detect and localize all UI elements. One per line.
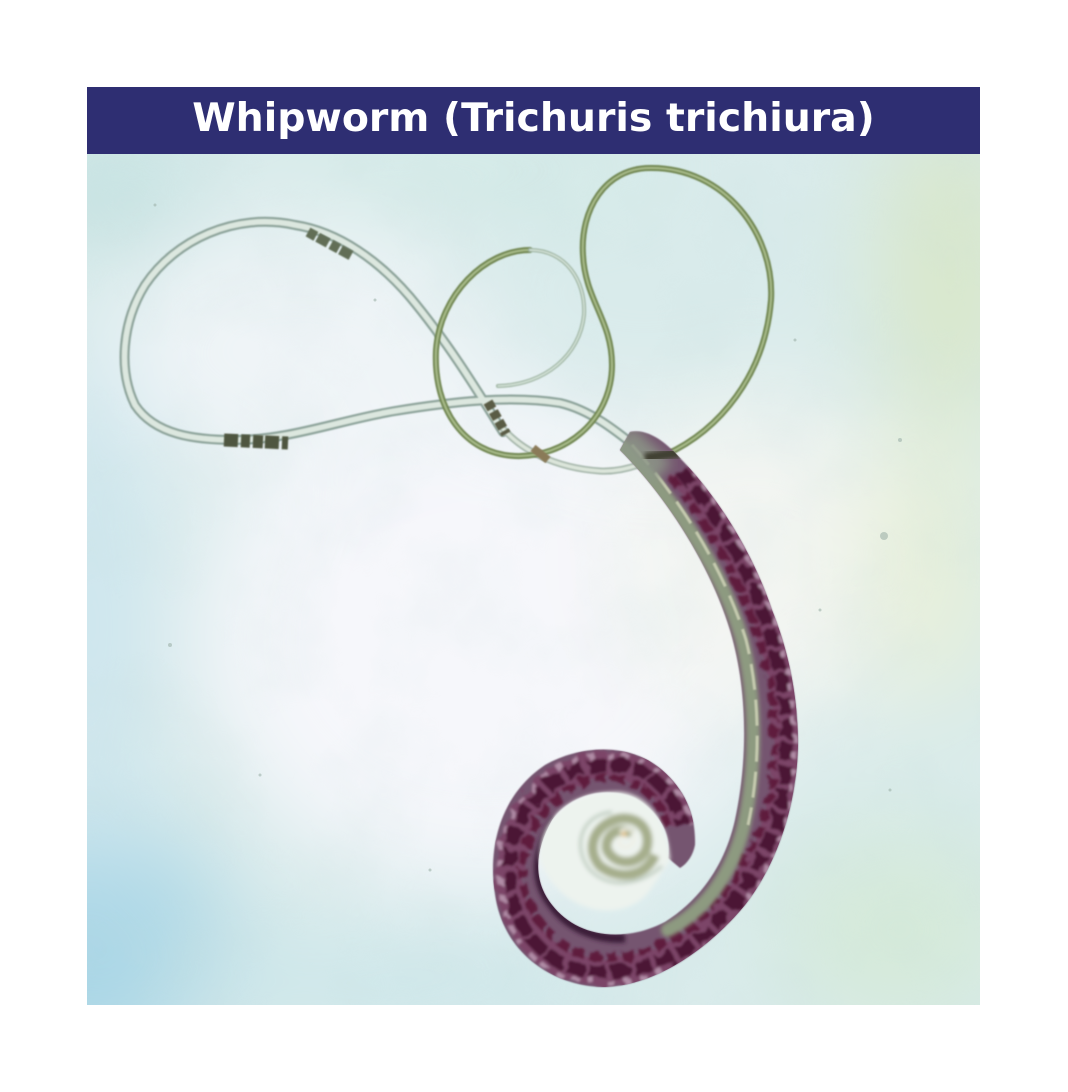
title text: Whipworm (Trichuris trichiura) bbox=[192, 95, 875, 141]
outer purple band and eggs bbox=[500, 470, 795, 983]
lower connecting strand bbox=[500, 425, 660, 471]
specks on background bbox=[154, 204, 902, 872]
inner pale-green gut margin bbox=[620, 445, 753, 930]
worm: pale spiral tail tip bbox=[540, 792, 670, 910]
dark inner edge of the spiral bbox=[539, 818, 625, 938]
title banner bbox=[87, 87, 980, 154]
worm: thin whip strand, left loop bbox=[125, 222, 660, 471]
worm: green whip strand, two inner loops bbox=[436, 168, 771, 456]
top of body: grey translucent section bbox=[622, 436, 662, 474]
worm segments: dark joints on the whip bbox=[224, 232, 548, 460]
worm: thick coiled body bbox=[493, 431, 798, 987]
photo: whipworm micrograph bbox=[87, 154, 980, 1005]
